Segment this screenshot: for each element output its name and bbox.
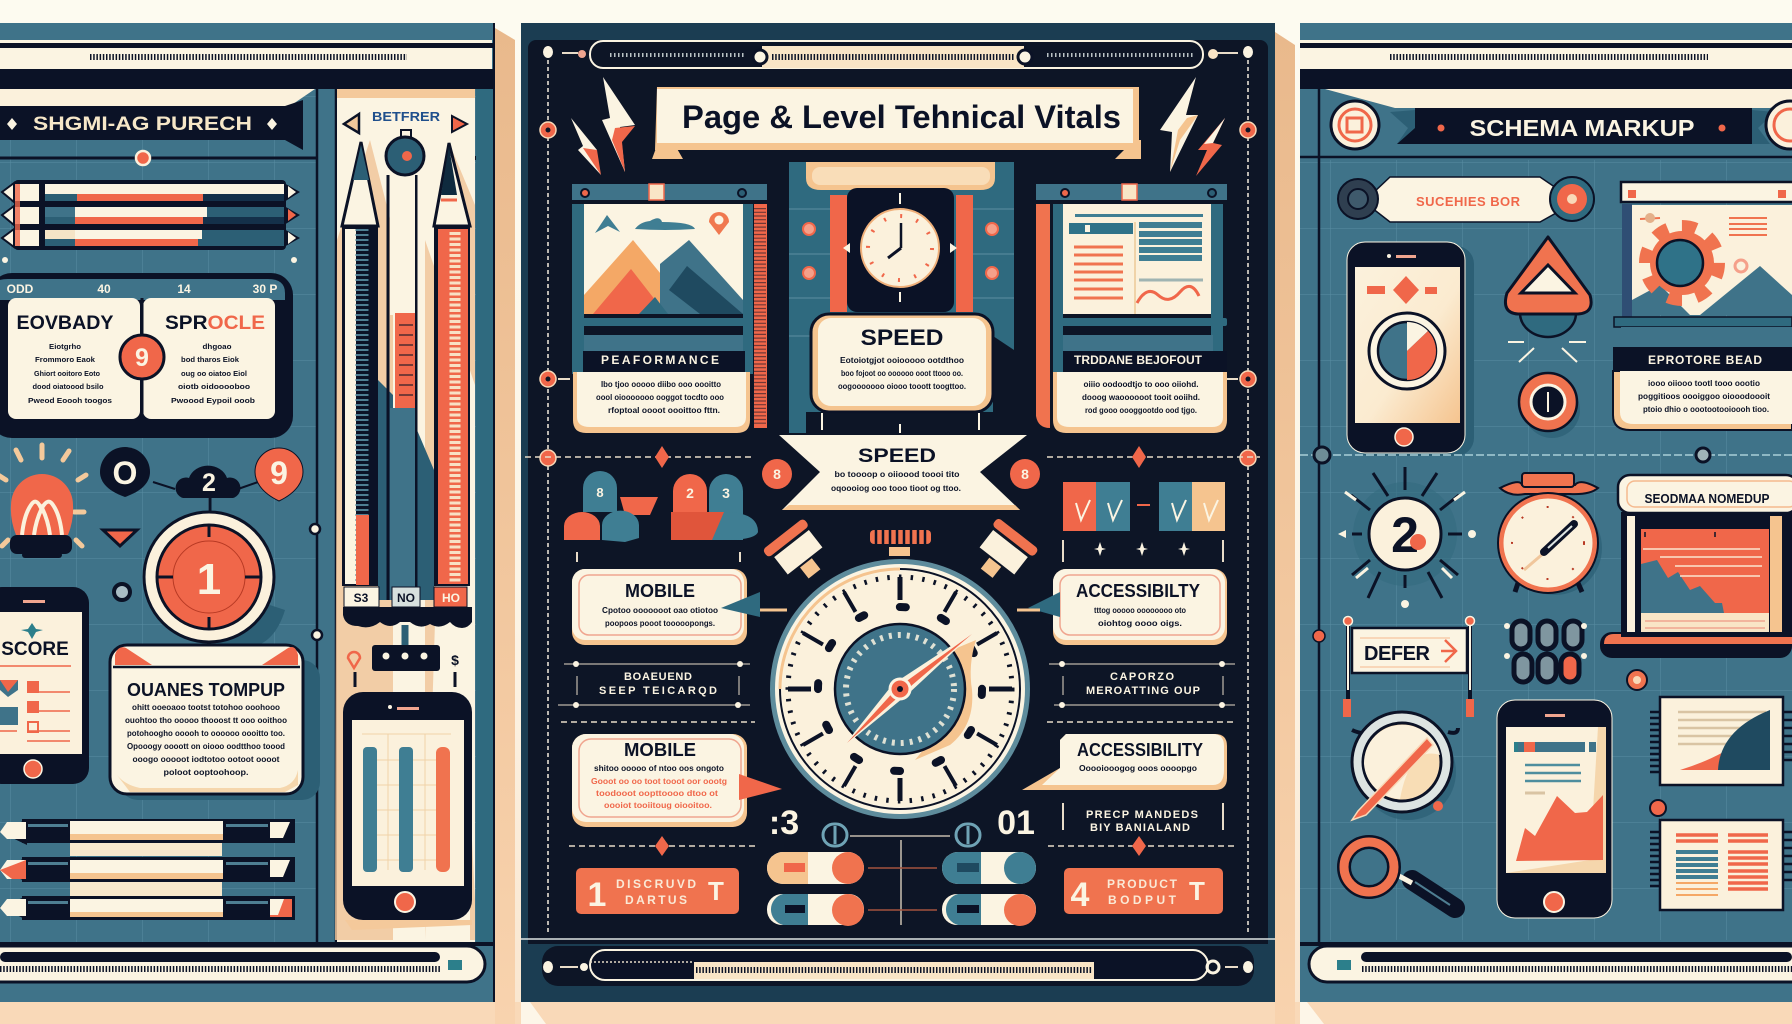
callout: mobile two: shitoo ooooo of ntoo oos ongoto xyxy=(594,763,724,773)
phone: area chart xyxy=(1497,700,1612,918)
callout: accessibility one: ACCESSIBILTY xyxy=(1076,581,1200,601)
text box: speed: oogooooooo oiooo tooott toogttoo. xyxy=(838,381,966,391)
heading: left ribbon xyxy=(0,89,315,150)
button: left: DARTUS xyxy=(625,893,687,907)
needle xyxy=(842,627,980,748)
pencils: lower set xyxy=(0,819,295,920)
icon: pins row xyxy=(100,447,303,512)
icons: checkboxes right xyxy=(577,482,1225,562)
text box: speed: SPEED xyxy=(860,325,944,350)
button: right: T xyxy=(1189,876,1205,906)
button: right xyxy=(1064,868,1223,914)
phone: score: SCORE xyxy=(1,639,69,660)
banner: speed: 8 xyxy=(773,466,781,482)
callout: text card: ohitt ooeoaoo tootst totohoo ooohooo xyxy=(132,703,280,712)
flag: defer xyxy=(1343,616,1474,717)
callout: mobile one xyxy=(572,569,787,645)
card: performance: PEAFORMANCE xyxy=(601,353,719,367)
label: lower right caption: BIY BANIALAND xyxy=(1090,822,1190,834)
badge: 9: 9 xyxy=(135,344,149,372)
callout: mobile two: oooiot tooiitoug oiooitoo. xyxy=(604,800,712,810)
title: schema markup: SCHEMA MARKUP xyxy=(1470,115,1694,141)
pencil: coral xyxy=(434,143,470,586)
callout: mobile one: MOBILE xyxy=(625,581,695,601)
text: left column: Pweod Eoooh toogos xyxy=(28,396,112,405)
phone: pie xyxy=(1347,242,1474,456)
text: left column: Eiotgrho xyxy=(49,342,81,351)
text: left column: dood oiatoood bsilo xyxy=(32,382,104,391)
icons: pins xyxy=(348,652,459,687)
banner: speed: bo toooop o oiioood toooi tito xyxy=(834,469,960,479)
label: left tick caption: SEEP TEICARQD xyxy=(599,685,717,697)
panel: left xyxy=(0,23,495,1002)
node: coral dots xyxy=(1313,630,1666,816)
icon: pins row: 2 xyxy=(202,469,216,497)
toggles xyxy=(767,852,1036,926)
icon: magnifier xyxy=(1344,842,1455,908)
icons: tombstone tabs left: 3 xyxy=(722,485,730,501)
text box: speed xyxy=(811,314,993,412)
text box: gear: iooo oiiooo tootl tooo oootio xyxy=(1648,378,1760,388)
label: arrows with word xyxy=(344,109,467,133)
callout: text card: ouohtoo tho ooooo thooost tt ooo ooithoo xyxy=(125,716,287,725)
icon: small node xyxy=(114,584,130,600)
text box: speed: Eotoiotgjot ooiooooo ootdthoo xyxy=(840,355,964,365)
window: chart card xyxy=(1600,475,1792,658)
card: two-column comparison xyxy=(0,273,293,438)
label: arrows with word: BETFRER xyxy=(372,109,441,124)
text box: speed: boo fojoot oo oooooo ooot ttooo oo. xyxy=(841,368,963,378)
footer bar: centre xyxy=(543,950,1253,980)
icon: clock xyxy=(843,193,957,302)
label: left tick caption: BOAEUEND xyxy=(624,671,692,683)
text box: performance: oool oiooooooo ooggot tocdto ooo xyxy=(596,392,724,402)
icon: sun 2: 2 xyxy=(1391,507,1419,563)
icon: pins row: 9 xyxy=(270,455,288,491)
text box: third: oiiio oodoodtjo to ooo oiiohd. xyxy=(1084,379,1198,389)
text: right column: SPROCLE xyxy=(165,313,265,334)
callout: mobile two: MOBILE xyxy=(624,740,696,760)
pencil base xyxy=(343,587,472,671)
phone: score xyxy=(0,587,89,784)
text: right column: oiotb oidooooboo xyxy=(178,382,250,391)
callout: accessibility one: tttog ooooo oooooooo oto xyxy=(1094,605,1186,615)
banner: speed xyxy=(762,435,1040,510)
icon: coral circle xyxy=(1519,373,1580,438)
icons: tombstone tabs left: 8 xyxy=(596,485,604,500)
callout: text card: OUANES TOMPUP xyxy=(127,680,285,700)
button: left xyxy=(576,868,739,914)
icon: lightning right xyxy=(1160,77,1225,176)
panel: centre xyxy=(521,23,1275,1002)
button: left: 1 xyxy=(588,876,606,914)
window: gear xyxy=(1613,182,1792,430)
callout: text card: potohoogho ooooh to oooooo oooitto too. xyxy=(127,729,285,738)
numbers and connectors: :3 xyxy=(769,804,799,842)
text: right column: Pwoood Eypoil ooob xyxy=(171,396,255,405)
text: right column xyxy=(165,313,265,405)
icons: tombstone tabs left: 2 xyxy=(686,485,694,501)
footer bar: right xyxy=(1300,942,1792,982)
icon: small diamond xyxy=(103,530,137,546)
text box: performance xyxy=(573,372,750,433)
heading: schema markup xyxy=(1325,89,1792,144)
card: two-column comparison: 40 xyxy=(97,282,111,296)
panel: right xyxy=(1300,23,1792,1002)
icons: pins: $ xyxy=(451,652,459,668)
flag: defer: DEFER xyxy=(1364,643,1431,665)
icon: sun 2 xyxy=(1338,467,1476,608)
crown xyxy=(762,517,1039,590)
text box: gear xyxy=(1613,371,1792,430)
icon: light bulb xyxy=(0,445,86,558)
badge: 9 xyxy=(120,335,164,379)
badges: top corners xyxy=(1331,101,1792,149)
banner: speed: oqoooiog ooo tooo tioot og ttoo. xyxy=(831,483,961,493)
pencil: ink xyxy=(342,142,378,586)
diamonds: lower xyxy=(655,836,1146,856)
button: right: BODPUT xyxy=(1108,893,1177,907)
numbers and connectors xyxy=(769,804,1035,925)
text box: performance: Ibo tjoo ooooo diibo ooo oooitto xyxy=(601,379,721,389)
banner: speed: SPEED xyxy=(858,446,936,467)
icons: tombstone tabs left xyxy=(564,471,758,542)
pill: label: SUCEHIES BOR xyxy=(1416,194,1521,209)
icon: pill grid xyxy=(1504,621,1587,682)
top bar: centre xyxy=(543,41,1253,68)
window: gear: EPROTORE BEAD xyxy=(1648,353,1762,367)
callout: text card: ooogo ooooot iodtotoo ootoot oooot xyxy=(132,755,280,764)
icon: alarm clock xyxy=(1498,473,1602,595)
button: left: T xyxy=(708,876,724,906)
text: left column: Ghiort ooitoro Eoto xyxy=(34,369,100,378)
callout: mobile two: Gooot oo oo toot tooot oor oootg xyxy=(591,776,727,786)
callout: accessibility two: ACCESSIBILITY xyxy=(1077,740,1203,760)
icon: lightning left xyxy=(571,77,635,175)
notebook: table xyxy=(1650,820,1792,910)
callout: mobile one: poopoos pooot tooooopongs. xyxy=(605,618,715,628)
button: left: DISCRUVD xyxy=(616,877,696,891)
button: right: PRODUCT xyxy=(1107,877,1178,891)
pencils: horizontal set xyxy=(2,180,300,250)
text: right column: oug oo oiatoo Eiol xyxy=(181,369,247,378)
footer bar: left xyxy=(0,942,495,982)
card: two-column comparison: ODD xyxy=(7,282,34,296)
notebook: area xyxy=(1650,697,1792,785)
image: mountains xyxy=(584,204,743,314)
pencil base: HO xyxy=(442,591,460,605)
pencil base: S3 xyxy=(354,591,369,605)
numbers and connectors: 01 xyxy=(997,804,1035,842)
pill: label xyxy=(1338,177,1594,222)
dial: number 1: 1 xyxy=(197,555,221,604)
phone: bars xyxy=(343,692,472,930)
dial: number 1 xyxy=(144,512,285,668)
text: right column: bod tharos Eiok xyxy=(181,355,240,364)
card: two-column comparison: 30 P xyxy=(253,282,277,296)
card: performance xyxy=(572,184,767,433)
dots: side nodes xyxy=(525,122,1260,468)
pencil base: NO xyxy=(397,591,415,605)
callout: accessibility two: Ooooiooogog ooos oooopgo xyxy=(1079,763,1197,773)
text: right column: dhgoao xyxy=(202,342,232,351)
text box: gear: ptoio dhio o oootootooioooh tioo. xyxy=(1643,404,1769,414)
image: document xyxy=(1063,204,1211,314)
card: speed centre xyxy=(789,162,1014,433)
text: left column: Frommoro Eaok xyxy=(35,355,96,364)
callout: mobile two xyxy=(572,734,782,827)
text box: gear: poggitioos oooiggoo oiooodoooit xyxy=(1638,391,1770,401)
text box: third: rod gooo oooggootdo ood tjgo. xyxy=(1085,405,1197,415)
text box: third: dooog waoooooot tooit ooiihd. xyxy=(1082,392,1200,402)
card: third column: TRDDANE BEJOFOUT xyxy=(1074,353,1203,367)
icon: round gauge with pencil xyxy=(1352,712,1458,820)
callout: mobile one: Cpotoo ooooooot oao otiotoo xyxy=(602,605,718,615)
banner: speed: 8 xyxy=(1021,466,1029,482)
panel: pencil column xyxy=(335,89,493,942)
stopwatch xyxy=(762,517,1039,819)
text: left column: EOVBADY xyxy=(16,313,114,334)
callout: text card: Opooogy oooott on oiooo oodtthoo toood xyxy=(127,742,285,751)
callout: accessibility one xyxy=(1017,569,1227,645)
button: right: 4 xyxy=(1071,876,1090,914)
callout: text card: poloot ooptoohoop. xyxy=(164,768,248,777)
callout: accessibility two xyxy=(1022,734,1227,790)
title: Page & Level Tehnical Vitals xyxy=(682,99,1121,135)
card: two-column comparison: 14 xyxy=(177,282,191,296)
tick marks xyxy=(788,577,1012,801)
inner dial xyxy=(835,624,976,760)
label: lower right caption: PRECP MANDEDS xyxy=(1086,809,1198,821)
icon: warning triangle xyxy=(1505,237,1591,362)
window: chart card: SEODMAA NOMEDUP xyxy=(1644,492,1770,506)
callout: accessibility one: oiohtog oooo oigs. xyxy=(1098,618,1182,628)
card: third column xyxy=(1036,184,1227,433)
label: left tick caption xyxy=(558,661,750,708)
label: right tick caption: CAPORZO xyxy=(1110,671,1174,683)
title banner xyxy=(652,87,1141,159)
label: lower right caption xyxy=(1063,803,1223,834)
icon: pins row: O xyxy=(113,455,137,491)
callout: text card xyxy=(110,645,320,800)
label: right tick caption: MEROATTING OUP xyxy=(1086,685,1200,697)
pencil: ruler xyxy=(386,130,424,600)
callout: mobile two: toodooot oopttoooo dtoo ot xyxy=(596,788,718,798)
text box: third xyxy=(1053,372,1227,433)
text box: performance: rfoptoal oooot oooittoo fttn. xyxy=(608,405,720,415)
label: right tick caption xyxy=(1049,661,1235,708)
text: left column xyxy=(16,313,114,405)
heading: left ribbon: SHGMI-AG PURECH xyxy=(33,114,252,135)
